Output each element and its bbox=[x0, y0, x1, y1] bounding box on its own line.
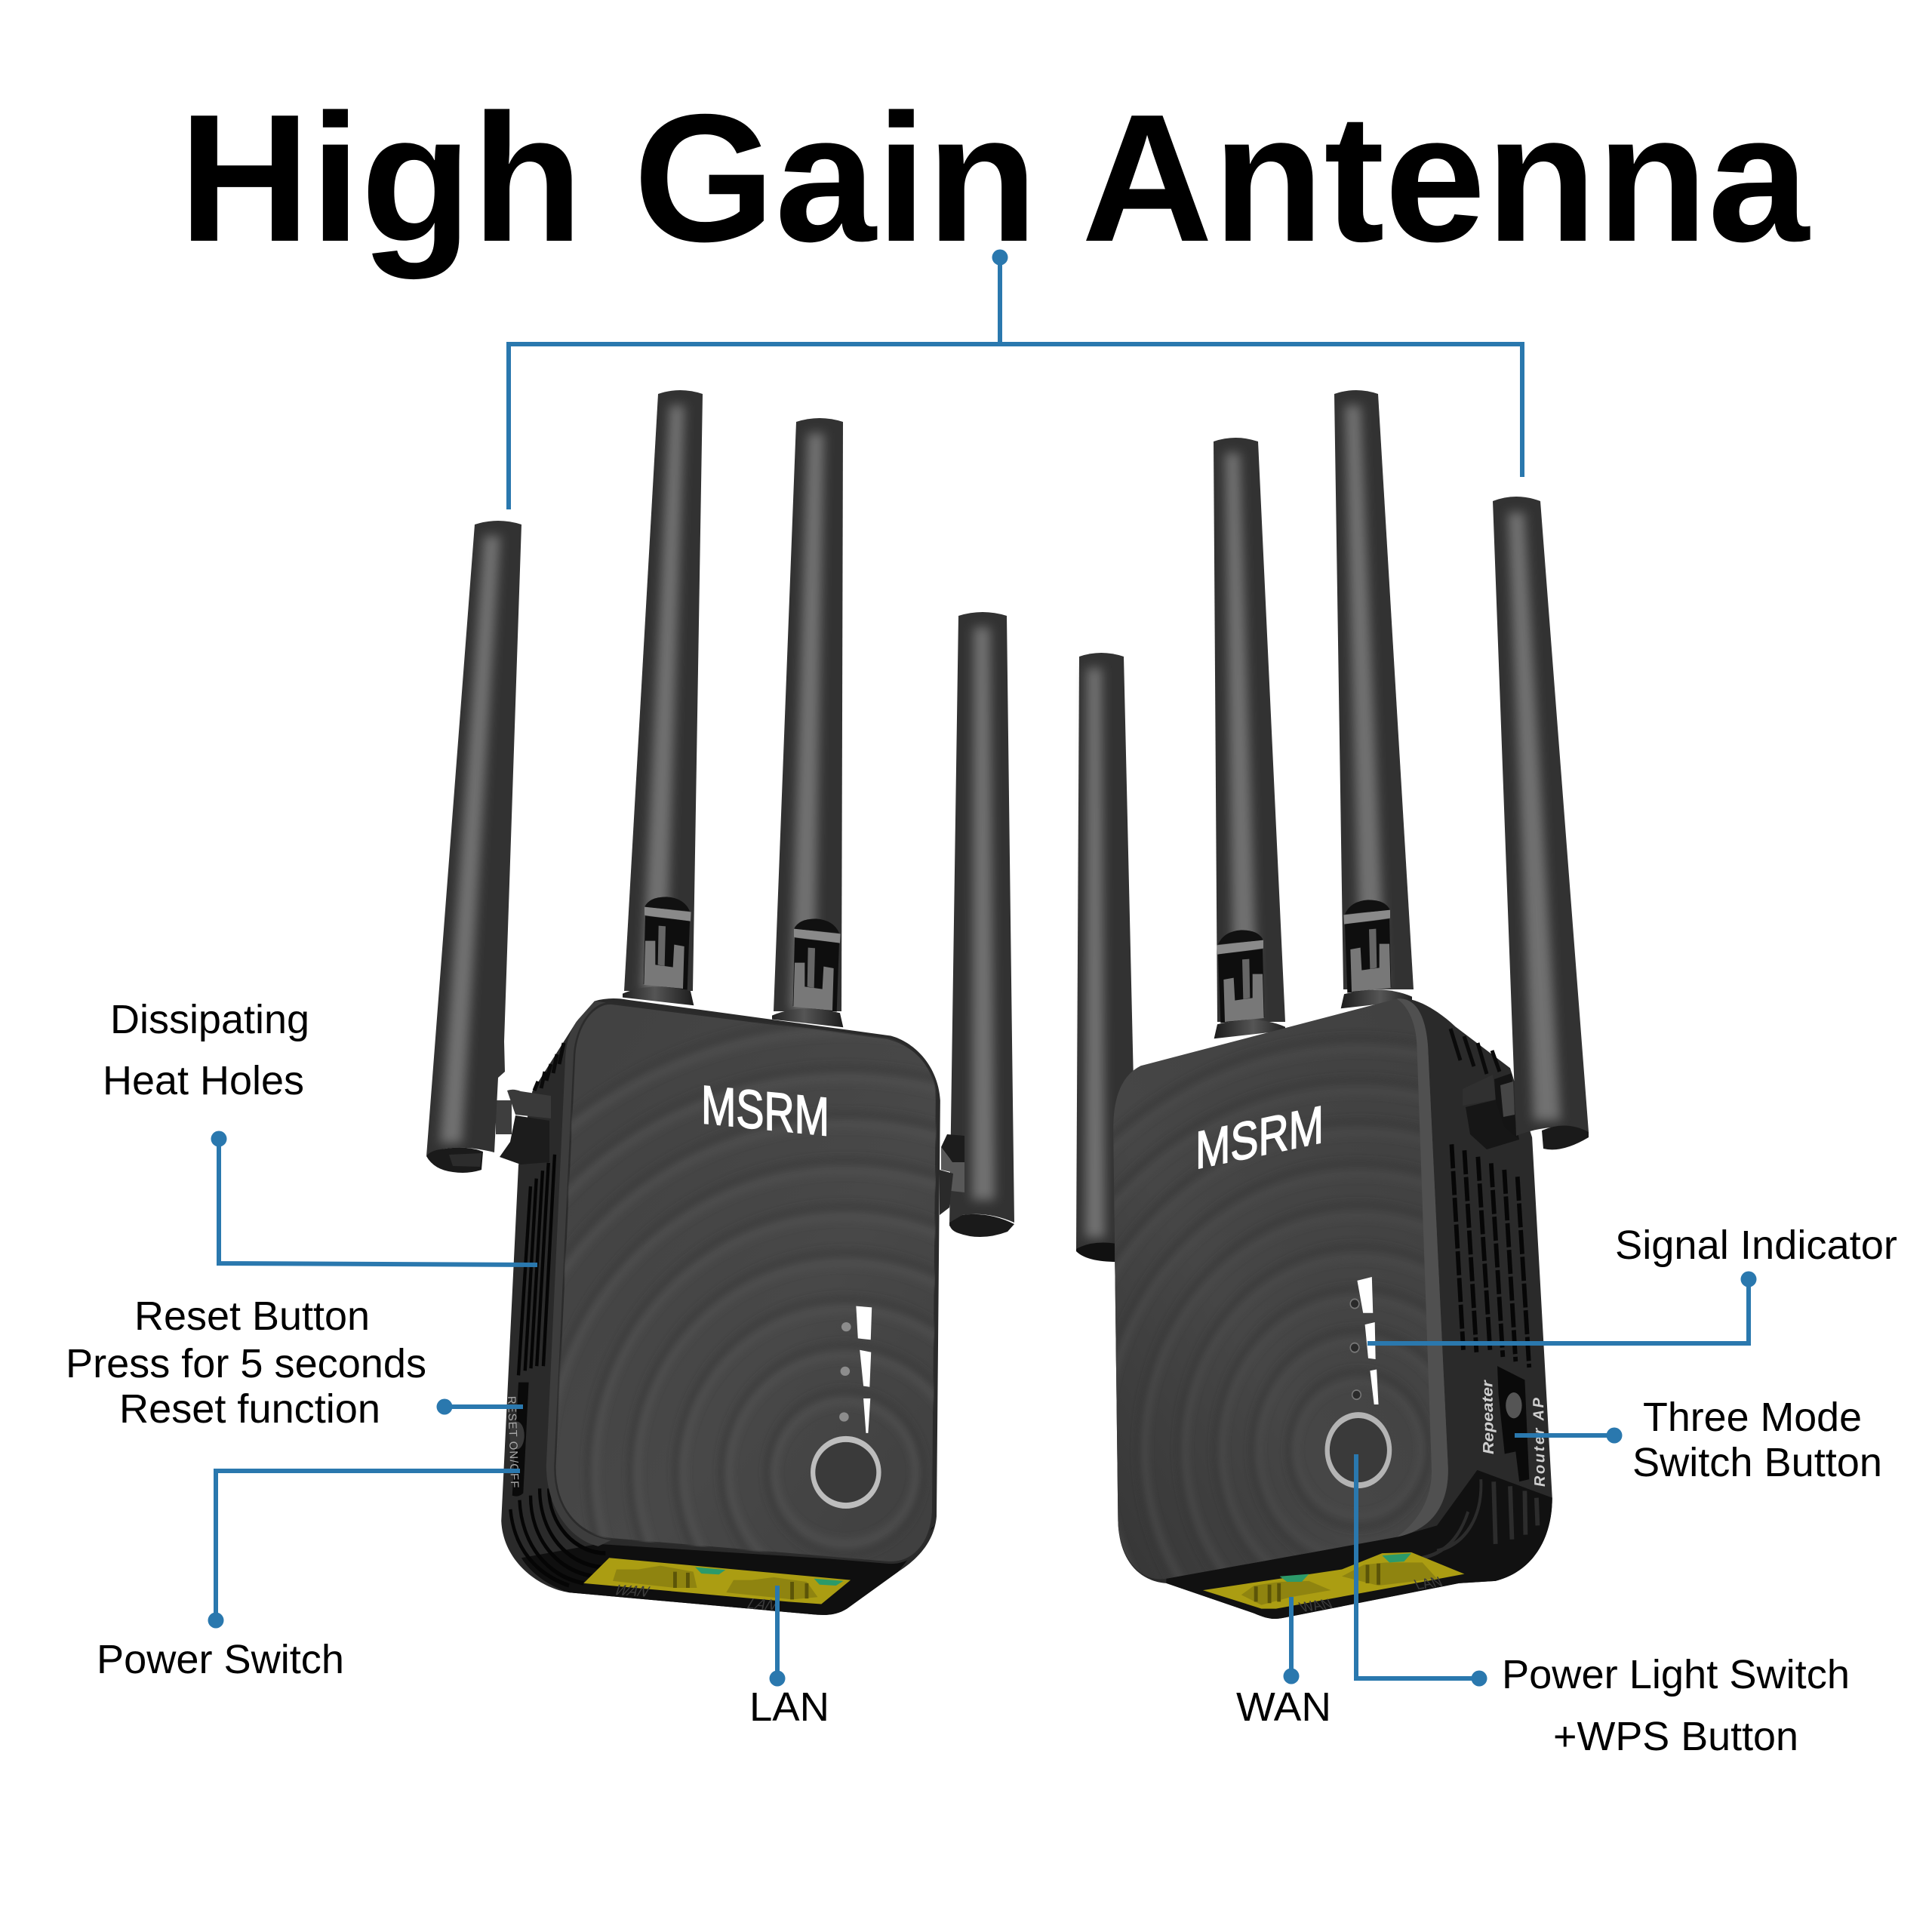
mount: left antenna hinge bbox=[496, 1090, 551, 1164]
label: power light switch and WPS button: Power Light Switch bbox=[1502, 1652, 1850, 1697]
callout: LAN line bbox=[770, 1586, 785, 1686]
label: WAN: WAN bbox=[1236, 1684, 1331, 1730]
mount: right antenna hinge bbox=[1463, 1073, 1519, 1149]
antenna clip: left device second bbox=[623, 897, 694, 1005]
label: dissipating heat holes bbox=[103, 997, 309, 1103]
upper side vents: left device bbox=[534, 1043, 564, 1091]
label: dissipating heat holes: Heat Holes bbox=[103, 1058, 304, 1103]
antenna: left device, left side bbox=[426, 521, 521, 1173]
callout: WAN line bbox=[1283, 1597, 1300, 1684]
antenna: left device, right side bbox=[949, 612, 1014, 1237]
side vents bbox=[1423, 1144, 1537, 1558]
face rings bbox=[1115, 1116, 1324, 1577]
antenna clip: right device second bbox=[1214, 930, 1285, 1038]
port label: WAN: WAN bbox=[611, 1582, 654, 1600]
label: power light switch and WPS button: +WPS Button bbox=[1553, 1714, 1798, 1759]
antenna: left device, second bbox=[624, 390, 703, 991]
left device body bbox=[501, 998, 940, 1615]
mode switch slot bbox=[1497, 1366, 1529, 1481]
callout: reset button line bbox=[436, 1399, 523, 1414]
face bbox=[555, 1003, 937, 1563]
power button bbox=[1327, 1415, 1389, 1485]
label: three mode switch button: Switch Button bbox=[1632, 1440, 1882, 1485]
callout: mode switch line bbox=[1515, 1428, 1623, 1443]
label: reset button: Reset function bbox=[119, 1386, 380, 1432]
side label: reset on off: RESET ON/OFF bbox=[505, 1396, 521, 1489]
label: power switch: Power Switch bbox=[97, 1637, 344, 1682]
title: High Gain Antenna bbox=[179, 77, 1810, 280]
callout: signal indicator line bbox=[1367, 1271, 1757, 1343]
mode switch knob bbox=[1506, 1392, 1522, 1418]
right device body bbox=[1113, 998, 1552, 1619]
side label: repeater: Repeater bbox=[1479, 1380, 1497, 1454]
side switch knob bbox=[509, 1422, 525, 1449]
antenna: right device, right side bbox=[1493, 497, 1589, 1149]
label: reset button bbox=[66, 1294, 426, 1432]
side switch slot bbox=[512, 1383, 529, 1497]
power button bbox=[813, 1439, 878, 1506]
antenna clip: right device third bbox=[1341, 900, 1412, 1008]
logo: right: MSRM bbox=[1195, 1094, 1324, 1180]
label: reset button: Press for 5 seconds bbox=[66, 1341, 426, 1386]
antenna clip: left device third bbox=[772, 918, 843, 1027]
callout: high gain antenna bracket bbox=[509, 249, 1522, 509]
callout: power switch line bbox=[208, 1471, 520, 1629]
port label: LAN: LAN bbox=[743, 1595, 781, 1614]
signal LEDs bbox=[1357, 1277, 1379, 1404]
side label: router AP: Router AP bbox=[1531, 1397, 1549, 1487]
face bbox=[1113, 998, 1448, 1579]
face bevel bbox=[546, 1001, 613, 1546]
callout: power light switch line bbox=[1356, 1454, 1487, 1686]
label: three mode switch button: Three Mode bbox=[1643, 1395, 1862, 1440]
label: three mode switch button bbox=[1632, 1395, 1882, 1485]
label: reset button: Reset Button bbox=[134, 1294, 370, 1339]
face rings bbox=[557, 1025, 936, 1552]
logo: left: MSRM bbox=[701, 1075, 829, 1148]
bottom dark edge bbox=[1166, 1470, 1552, 1619]
label: signal indicator: Signal Indicator bbox=[1615, 1223, 1897, 1268]
ethernet ports bbox=[583, 1558, 851, 1604]
bottom dark edge bbox=[521, 1525, 935, 1615]
antenna: right device, second bbox=[1214, 438, 1285, 1022]
port label: WAN right: WAN bbox=[1297, 1597, 1336, 1616]
indicator dots bbox=[839, 1322, 851, 1422]
label: dissipating heat holes: Dissipating bbox=[110, 997, 309, 1042]
label: power light switch and WPS button bbox=[1502, 1652, 1850, 1759]
antenna: right device, left side bbox=[1076, 653, 1137, 1262]
antenna: right device, third bbox=[1334, 390, 1414, 989]
upper side vents: right device bbox=[1451, 1029, 1500, 1074]
label: LAN: LAN bbox=[749, 1684, 829, 1730]
ethernet ports bbox=[1203, 1552, 1464, 1609]
face bevel bbox=[1397, 998, 1448, 1537]
port label: LAN right: LAN bbox=[1411, 1574, 1445, 1593]
side vents bbox=[510, 1155, 605, 1586]
indicator dots bbox=[1350, 1299, 1361, 1399]
callout: heat holes line bbox=[211, 1131, 537, 1265]
body silhouette bbox=[501, 998, 940, 1615]
body silhouette bbox=[1113, 998, 1552, 1619]
antenna: left device, third bbox=[774, 418, 843, 1011]
mount: left device right hinge bbox=[940, 1134, 964, 1215]
signal LEDs bbox=[856, 1306, 872, 1433]
